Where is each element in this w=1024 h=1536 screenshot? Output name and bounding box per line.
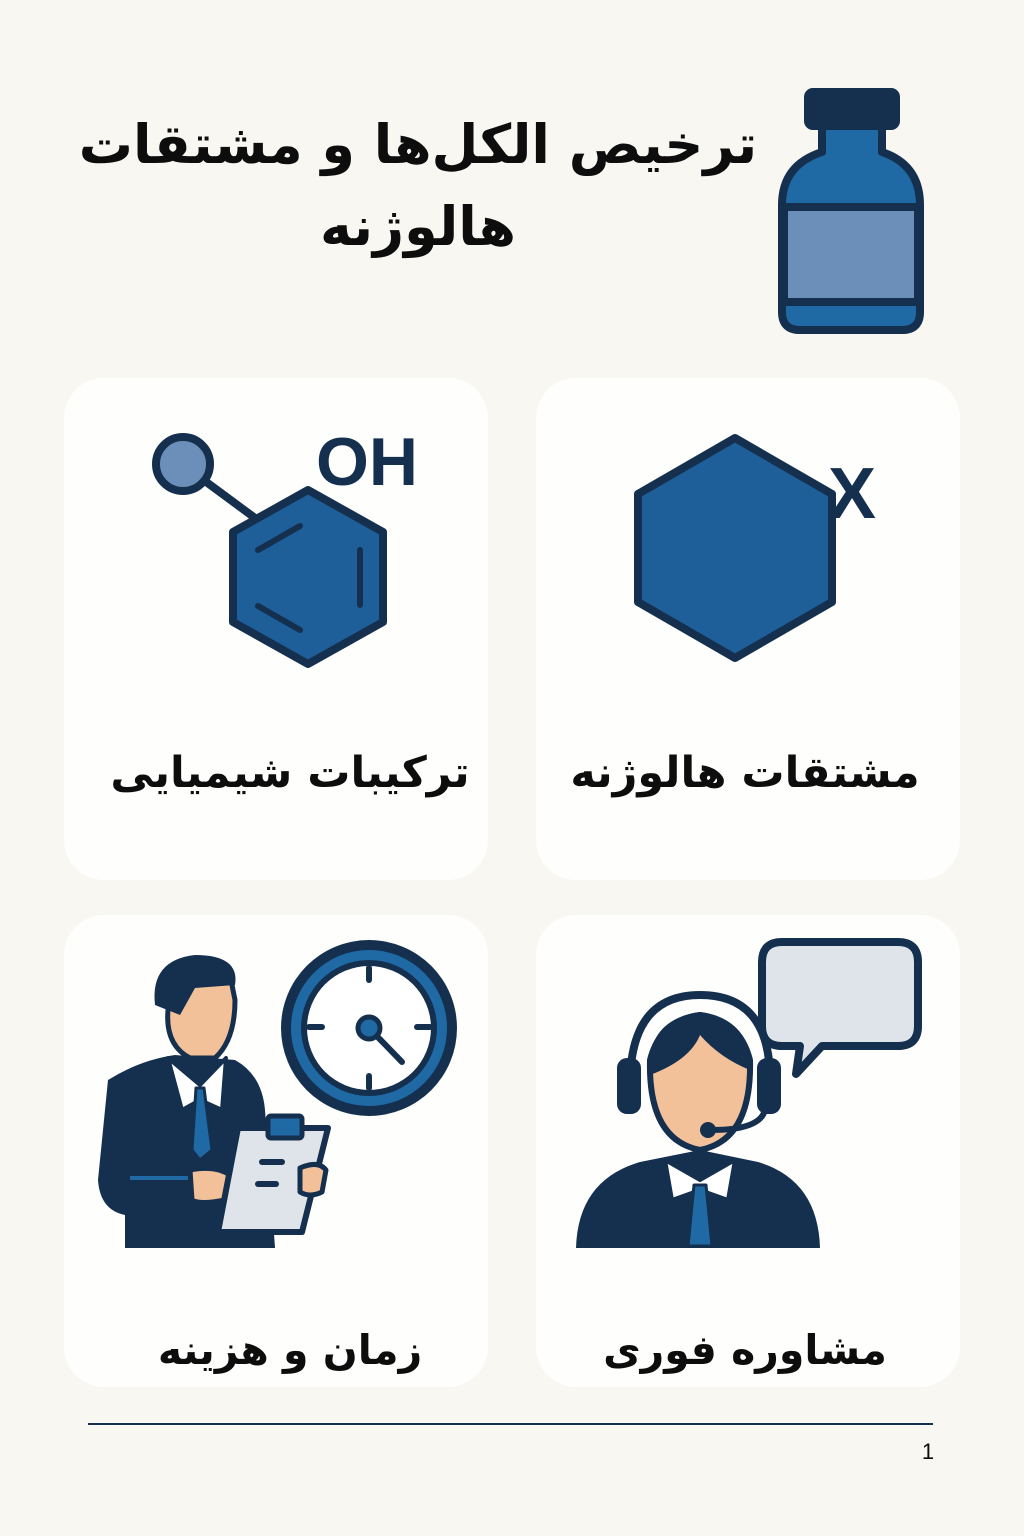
label: مشتقات هالوژنه — [570, 748, 920, 798]
label: ترکیبات شیمیایی — [110, 748, 470, 798]
title — [79, 113, 757, 258]
label: زمان و هزینه — [158, 1326, 422, 1375]
panel: time and cost — [64, 915, 488, 1387]
panel: instant consultation — [536, 915, 960, 1387]
panel: halogen derivatives — [536, 378, 960, 880]
label: مشاوره فوری — [603, 1326, 887, 1375]
icon: speech bubble — [762, 942, 918, 1074]
title: ترخیص الکل‌ها و مشتقات — [79, 113, 757, 177]
page number: 1 — [922, 1439, 934, 1464]
icon: benzene with OH — [156, 437, 383, 664]
panel: chemical compounds — [64, 378, 488, 880]
icon: businessman with clipboard — [98, 955, 328, 1248]
icon: support agent with headset — [576, 995, 820, 1248]
icon: clock — [281, 940, 457, 1116]
icon: bottle — [782, 92, 920, 330]
title: هالوژنه — [320, 195, 516, 258]
icon: hexagon with X — [638, 438, 832, 658]
panel: chemical compounds: OH — [316, 424, 418, 500]
panel: halogen derivatives: X — [828, 454, 876, 534]
